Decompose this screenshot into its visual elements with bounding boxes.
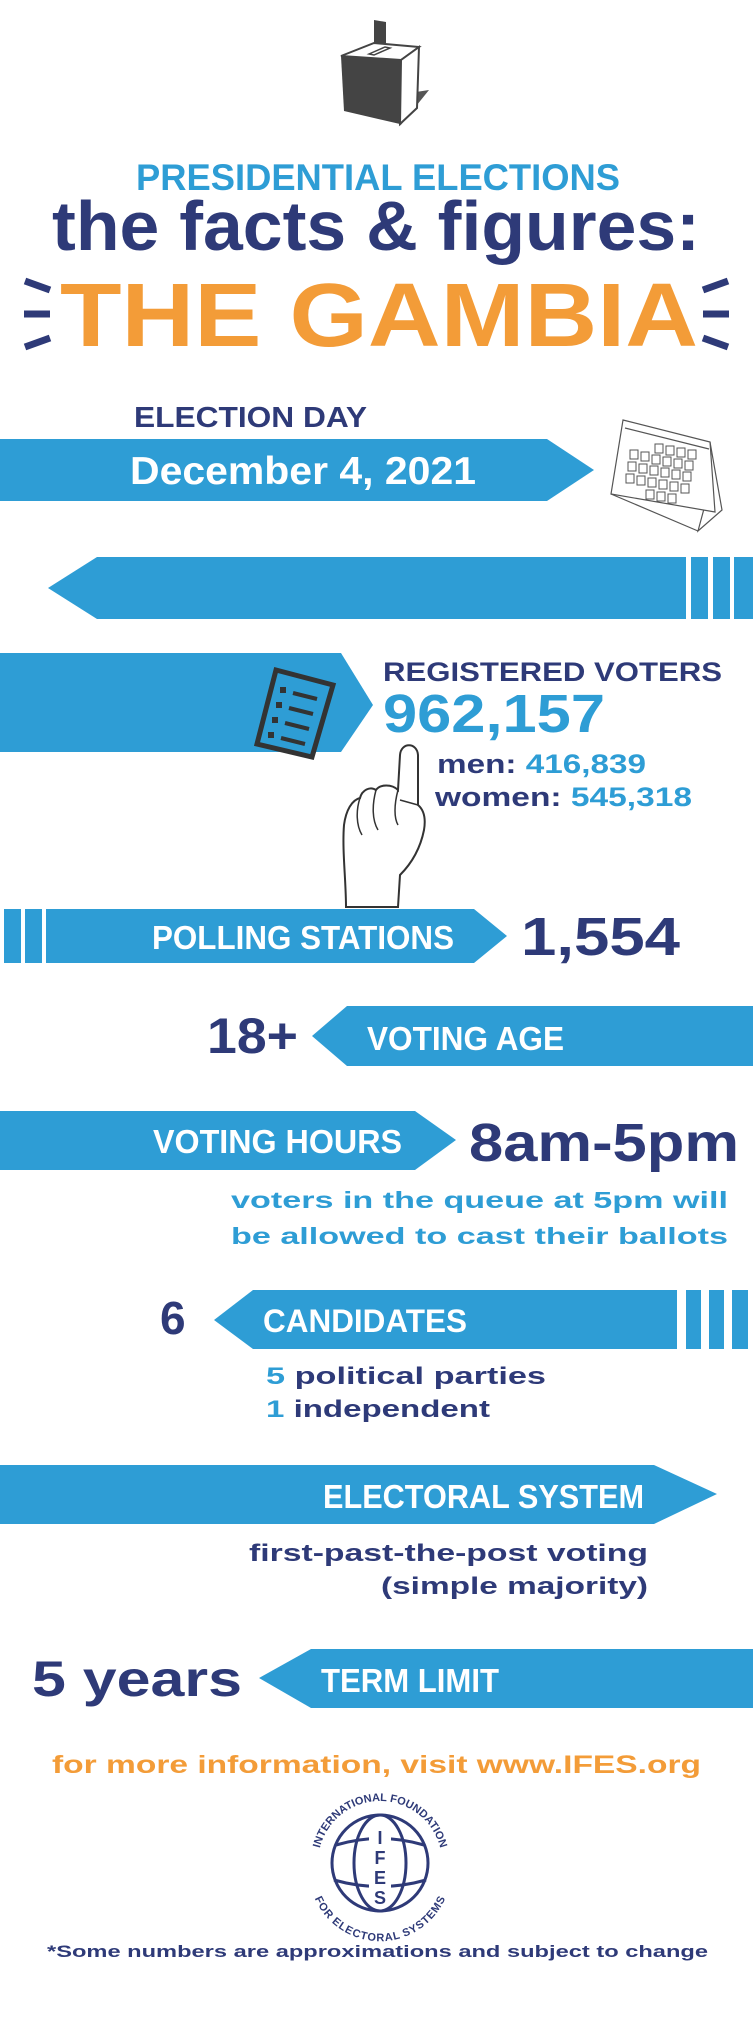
number: candidates: 6: [160, 1292, 186, 1344]
banner: voting age: VOTING AGE: [367, 1020, 564, 1057]
subtitle: presidential elections: PRESIDENTIAL ELECTIONS: [136, 157, 620, 198]
banner: voting age: [312, 1006, 753, 1066]
logo: IFES: S: [374, 1888, 386, 1908]
text: registered voters: men: 416,839: [437, 749, 646, 779]
link text: for more information, visit www.IFES.org: [52, 1751, 701, 1779]
banner: registered voters: [0, 653, 373, 752]
text: electoral system: first-past-the-post voting: [249, 1540, 648, 1567]
icon: ballot box: [341, 20, 429, 126]
logo: IFES: I: [377, 1828, 383, 1848]
footnote: *Some numbers are approximations and subject to change: [47, 1942, 708, 1961]
banner: election date: [0, 439, 594, 501]
banner: election date: December 4, 2021: [130, 450, 476, 493]
banner: polling stations: [4, 909, 507, 963]
logo: IFES: [312, 1793, 448, 1942]
text: registered voters: women: 545,318: [434, 782, 692, 812]
number: term limit: 5 years: [32, 1651, 242, 1707]
banner: voting hours: VOTING HOURS: [153, 1123, 402, 1160]
text: electoral system: [249, 1540, 648, 1600]
title: THE GAMBIA with dashes: THE GAMBIA: [60, 266, 698, 366]
logo: IFES: FOR ELECTORAL SYSTEMS: [315, 1896, 444, 1942]
icon: calendar: [611, 420, 722, 531]
banner: candidates: [214, 1290, 748, 1349]
title: the facts & figures: the facts & figures:: [52, 187, 700, 265]
decorative banner arrow left: [48, 557, 753, 619]
banner: term limit: TERM LIMIT: [321, 1662, 499, 1699]
banner: polling stations: POLLING STATIONS: [152, 919, 454, 956]
icon: raised hand: [343, 745, 425, 907]
text: electoral system: (simple majority): [381, 1573, 648, 1600]
logo: IFES: E: [374, 1868, 386, 1888]
note: queue: voters in the queue at 5pm will: [231, 1187, 728, 1213]
text: registered voters: REGISTERED VOTERS: [383, 657, 722, 687]
text: registered voters: [383, 657, 722, 812]
logo: IFES: F: [374, 1848, 386, 1868]
banner: electoral system: ELECTORAL SYSTEM: [323, 1478, 644, 1515]
text: registered voters: 962,157: [383, 684, 605, 744]
banner: candidates: CANDIDATES: [263, 1303, 467, 1339]
text: candidate breakdown: 1 independent: [266, 1396, 490, 1423]
number: polling stations: 1,554: [521, 907, 680, 967]
number: voting hours: 8am-5pm: [469, 1113, 739, 1173]
banner: electoral system: [0, 1465, 717, 1524]
note: queue: be allowed to cast their ballots: [231, 1223, 728, 1249]
icon: ballot list: [257, 670, 333, 757]
note: queue: [231, 1187, 728, 1249]
text: candidate breakdown: 5 political parties: [266, 1363, 546, 1390]
number: voting age: 18+: [207, 1008, 298, 1064]
banner: term limit: [259, 1649, 753, 1708]
heading: election day: ELECTION DAY: [134, 402, 367, 434]
text: candidate breakdown: [266, 1363, 546, 1423]
banner: voting hours: [0, 1111, 456, 1170]
logo: IFES: INTERNATIONAL FOUNDATION: [312, 1793, 448, 1848]
